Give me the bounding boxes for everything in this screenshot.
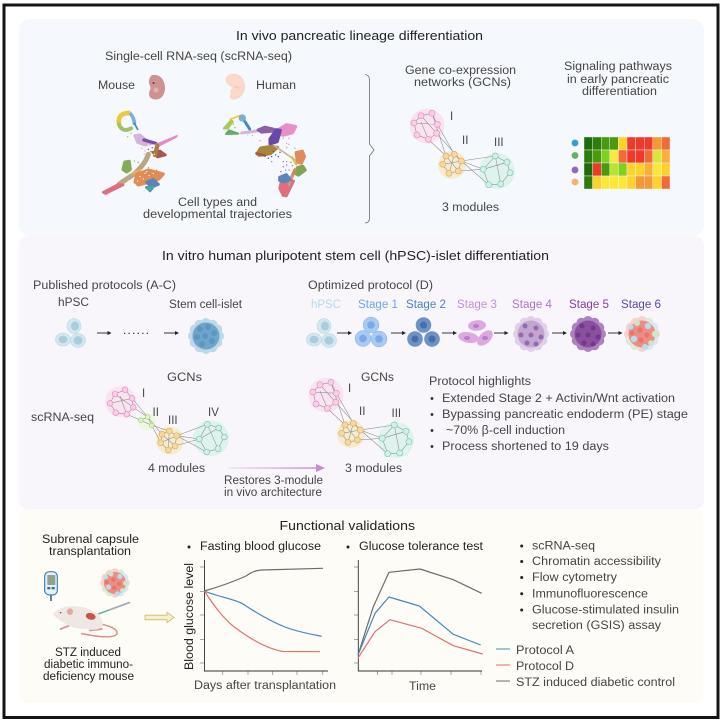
caption: restores 3-module: Restores 3-module [224,475,323,487]
icon: stage 2 cells [407,317,440,347]
network: 3 modules in vitro: I [348,383,351,395]
label: GCNs optimized: GCNs [361,372,394,384]
network: 4 modules: I [142,388,145,400]
stage labels: Stage 5 [569,299,609,311]
axis label: days after transplantation: Days after transplantation [194,680,336,692]
label: GCNs: GCNs [167,372,202,384]
network: 4 modules: III [168,415,178,427]
text: protocol highlights [429,376,688,453]
heading: signaling pathways: Signaling pathways [564,61,672,73]
arrow: restores architecture [228,464,325,472]
label: 3 modules: 3 modules [345,463,402,475]
stage labels: Stage 2 [406,299,446,311]
arrow and dots: published protocols [97,325,179,337]
chart: human UMAP [224,114,305,196]
icon: stage 3 cells [457,319,496,349]
icon: mouse with syringe [53,602,130,637]
panel: in vitro hPSC-islet differentiation [18,236,704,509]
caption: cell types [143,197,292,221]
list: assays: Glucose-stimulated insulin [532,604,679,616]
icon: stage 5 islet [570,316,606,352]
label: mouse: Mouse [98,80,135,92]
stage labels: Stage 3 [457,299,497,311]
heading: in vitro: In vitro human pluripotent stem cell (hPSC)-islet differentiation [162,249,549,263]
panel: functional validations [18,509,704,703]
network: 3 modules in vitro: III [392,408,401,420]
icon: human embryo [226,74,245,99]
text: protocol highlights: Process shortened to 19 days [442,441,609,453]
heading: gene co-expression networks [405,65,516,89]
text: single-cell RNA-seq: Single-cell RNA-seq (scRNA-seq) [105,51,292,63]
network: 3 modules in vitro [308,378,414,458]
stage labels [311,299,661,311]
chart: fasting blood glucose [184,560,336,692]
heading: signaling pathways: in early pancreatic [567,74,669,86]
text: protocol highlights: Protocol highlights [429,376,531,388]
icon: stage 4 islet [513,316,549,352]
network: 3 modules in vivo [410,108,515,189]
heading: gene co-expression networks: Gene co-expression [405,65,516,77]
label: scRNA-seq: scRNA-seq [31,412,94,424]
label: stem cell-islet: Stem cell-islet [169,299,243,311]
chart: glucose tolerance test [354,560,483,693]
label: human: Human [256,80,296,92]
legend: Protocol D [516,661,574,673]
arrow [391,331,406,335]
heading: in vivo: In vivo pancreatic lineage differentiation [236,29,483,43]
arrow [337,331,352,335]
axis label: blood glucose level: Blood glucose level [184,563,196,670]
heading: gene co-expression networks: networks (GCNs) [414,77,511,89]
label: 3 modules: 3 modules [442,202,499,214]
network: 3 modules in vivo: III [494,137,504,149]
list: assays: secretion (GSIS) assay [532,620,661,632]
stage labels: hPSC [311,299,341,311]
icon: hPSC cells [56,318,86,348]
text: subrenal capsule transplantation [42,534,139,558]
icon: stage 1 cells [355,317,387,347]
caption: restores 3-module [224,475,323,499]
arrow [552,331,567,335]
legend [496,645,675,689]
stage labels: Stage 4 [512,299,553,311]
list: assays: Flow cytometry [532,572,617,584]
list: assays: Chromatin accessibility [532,556,661,568]
list: assays: scRNA-seq [532,540,595,552]
text: STZ mouse: deficiency mouse [43,671,134,683]
text: STZ mouse: diabetic immuno- [44,659,133,671]
network: 3 modules in vitro: II [359,406,365,418]
network: 3 modules in vivo: II [462,135,468,147]
chart: mouse UMAP [103,113,178,194]
arrow [494,331,508,335]
text: subrenal capsule transplantation: transplantation [49,546,131,558]
text: protocol highlights: Extended Stage 2 + Activin/Wnt activation [442,393,675,405]
heading: signaling pathways [564,61,672,98]
stage labels: Stage 6 [621,299,661,311]
text: STZ mouse [43,647,134,683]
heading: signaling pathways: differentiation [582,86,657,98]
icon: stage 6 islet [624,316,660,352]
icon: hPSC cells (protocol D) [306,318,336,348]
label: hPSC: hPSC [58,297,89,309]
caption: cell types: developmental trajectories [143,209,292,221]
caption: cell types: Cell types and [178,197,257,209]
label: 4 modules: 4 modules [148,463,205,475]
arrow [608,331,622,335]
list: assays [520,540,679,632]
heading: functional validations: Functional validations [280,519,415,533]
caption: restores 3-module: in vivo architecture [224,487,322,499]
text: optimized protocol: Optimized protocol (D) [308,280,433,292]
list: assays: Immunofluorescence [532,588,648,600]
text: protocol highlights: ~70% β-cell induction [446,425,565,437]
heading: fasting blood glucose: Fasting blood glucose [200,541,321,553]
icon: islet graft [100,568,130,598]
network: 4 modules [105,386,229,456]
arrow and dots: published protocols: ...... [123,325,149,337]
axis label: time: Time [409,681,436,693]
heading: glucose tolerance test: Glucose tolerance test [359,541,484,553]
legend: Protocol A [516,645,574,657]
icon: mouse embryo [149,75,165,100]
network: 3 modules in vivo: I [450,111,453,123]
legend: STZ induced diabetic control [516,677,675,689]
panel: in vivo pancreatic lineage differentiation [18,19,704,236]
text: STZ mouse: STZ induced [55,647,121,659]
network: 4 modules: IV [208,407,219,419]
arrow [442,331,457,335]
network: 4 modules: II [152,407,159,419]
heatmap: signaling pathways [571,137,670,189]
icon: glucometer [45,572,57,601]
stage labels: Stage 1 [358,299,398,311]
brace [365,74,374,223]
icon: stem cell islet [188,318,224,354]
arrow: to charts [145,612,174,623]
text: protocol highlights: Bypassing pancreatic endoderm (PE) stage [442,409,688,421]
text: subrenal capsule transplantation: Subrenal capsule [42,534,139,546]
text: published protocols: Published protocols (A-C) [33,280,176,292]
